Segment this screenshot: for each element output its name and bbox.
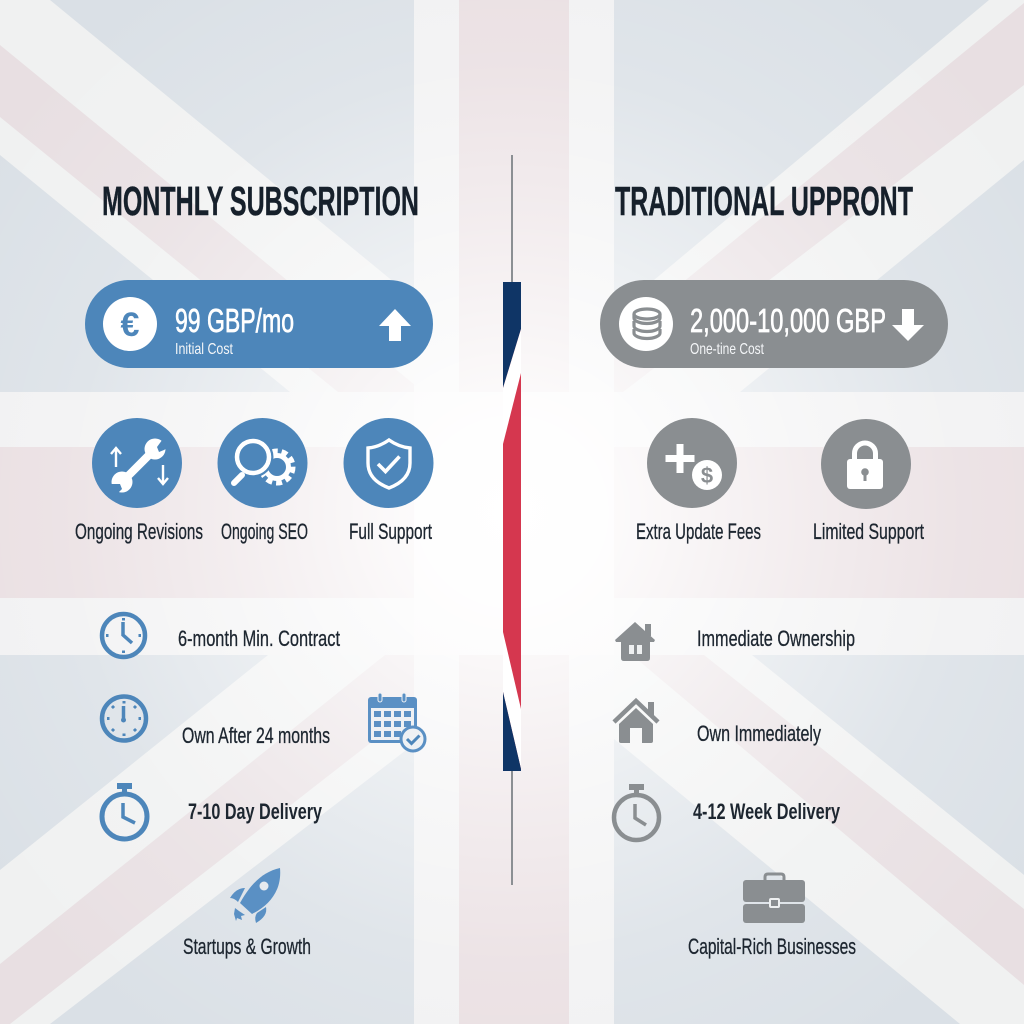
upfront price: 2,000-10,000 GBP <box>690 302 886 339</box>
text: own after 24 months: Own After 24 months <box>182 723 330 748</box>
text: 4-12 week delivery: 4-12 Week Delivery <box>693 799 841 824</box>
icon: long delivery stopwatch <box>614 784 659 840</box>
heading: monthly subscription: MONTHLY SUBSCRIPTION <box>102 178 419 224</box>
icon: calendar with check <box>368 693 425 751</box>
icon: contract clock <box>102 614 145 657</box>
monthly price: 99 GBP/mo <box>175 302 294 339</box>
icon: fast delivery stopwatch <box>102 783 147 839</box>
label: limited support: Limited Support <box>813 519 924 544</box>
center flag strip <box>503 282 521 771</box>
icon: coin stack <box>619 297 673 351</box>
initial cost label: Initial Cost <box>175 341 233 358</box>
icon: ongoing seo magnifier and gear <box>218 418 308 508</box>
icon: ownership clock <box>102 696 146 740</box>
icon: euro coin <box>103 297 157 351</box>
label: startups and growth: Startups & Growth <box>183 934 311 959</box>
center divider line <box>511 155 513 885</box>
icon: extra update fees: $ <box>701 463 713 488</box>
icon: startup rocket <box>230 868 280 923</box>
label: ongoing seo: Ongoing SEO <box>221 519 308 544</box>
icon: small house <box>615 622 655 661</box>
icon: down arrow <box>892 309 924 341</box>
label: ongoing revisions: Ongoing Revisions <box>75 519 203 544</box>
text: 7-10 day delivery: 7-10 Day Delivery <box>188 799 323 824</box>
text: own immediately: Own Immediately <box>697 721 821 746</box>
icon: up arrow <box>379 309 411 341</box>
text: 6-month minimum contract: 6-month Min. Contract <box>178 626 340 651</box>
icon: house with roof <box>614 701 658 743</box>
icon: extra update fees <box>647 418 737 508</box>
label: capital-rich businesses: Capital-Rich Businesses <box>688 934 856 959</box>
icon: euro coin: € <box>121 306 140 344</box>
icon: limited support padlock <box>821 419 911 509</box>
label: full support: Full Support <box>349 519 432 544</box>
icon: full support shield <box>344 418 434 508</box>
label: extra update fees: Extra Update Fees <box>636 519 761 544</box>
panel: monthly cost pill <box>85 280 433 368</box>
icon: briefcase <box>743 874 805 923</box>
one-time cost label: One-tine Cost <box>690 341 764 358</box>
text: immediate ownership: Immediate Ownership <box>697 626 855 651</box>
icon: ongoing revisions wrench <box>92 418 182 508</box>
panel: upfront cost pill <box>600 280 948 368</box>
